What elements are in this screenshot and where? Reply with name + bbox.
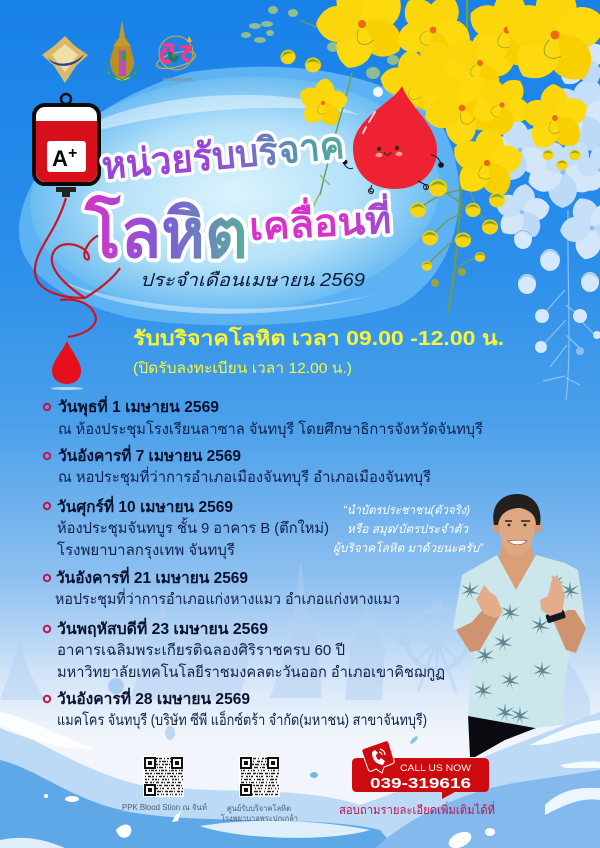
water splash bottom xyxy=(0,678,600,848)
tube forming heart xyxy=(35,198,120,337)
item 3: ห้องประชุมจันทบูร ชั้น 9 อาคาร B (ตึกใหม่) xyxy=(57,517,329,538)
item 4 xyxy=(44,566,400,609)
bag connector xyxy=(56,187,76,197)
arms xyxy=(456,606,586,653)
item 4: วันอังคารที่ 21 เมษายน 2569 xyxy=(56,566,248,587)
QR caption 2 xyxy=(221,803,298,823)
QR codes xyxy=(143,756,280,797)
logo: royal emblem xyxy=(104,20,140,82)
QR caption 2: โรงพยาบาลพระปกเกล้า xyxy=(221,813,298,823)
blood type label: + xyxy=(68,145,77,162)
schedule list xyxy=(44,395,483,730)
blood type label: A xyxy=(52,146,68,171)
falling blood drop xyxy=(51,341,83,390)
QR caption 2: ศูนย์รับบริจาคโลหิต xyxy=(227,803,291,814)
red panel xyxy=(352,758,489,799)
logo: gold emblem xyxy=(42,36,88,83)
item 5: มหาวิทยาลัยเทคโนโลยีราชมงคลตะวันออก อำเภอเขาคิชฌกูฏ xyxy=(57,663,445,681)
bag hook xyxy=(61,94,71,104)
item 2: วันอังคารที่ 7 เมษายน 2569 xyxy=(58,444,241,465)
logos xyxy=(42,20,197,83)
neck xyxy=(497,540,536,590)
enquiry text: สอบถามรายละเอียดเพิ่มเติมได้ที่ xyxy=(339,801,495,817)
head xyxy=(498,505,536,556)
donation time: รับบริจาคโลหิต เวลา 09.00 -12.00 น. xyxy=(133,326,504,350)
phone icon bubble xyxy=(362,741,394,773)
pale water swirl behind title xyxy=(19,63,459,327)
item 3: โรงพยาบาลกรุงเทพ จันทบุรี xyxy=(57,541,235,560)
QR code 2 xyxy=(239,756,280,797)
item 2 xyxy=(44,444,431,487)
item 2: ณ หอประชุมที่ว่าการอำเภอเมืองจันทบุรี อำเภอเมืองจันทบุรี xyxy=(58,466,431,487)
title line 1: หน่วยรับบริจาค xyxy=(100,125,346,188)
face xyxy=(505,521,530,545)
item 5: วันพฤหัสบดีที่ 23 เมษายน 2569 xyxy=(57,617,268,638)
quote: ผู้บริจาคโลหิต มาด้วยนะครับ” xyxy=(333,541,484,556)
item 4: หอประชุมที่ว่าการอำเภอแก่งหางแมว อำเภอแก่งหางแมว xyxy=(55,588,400,609)
flowers: yellow golden shower xyxy=(241,0,600,313)
item 3: วันศุกร์ที่ 10 เมษายน 2569 xyxy=(57,495,233,517)
QR code 1 xyxy=(143,756,184,797)
blood bag with tube xyxy=(34,94,120,337)
logo: anniversary ring xyxy=(155,36,197,81)
call us box xyxy=(352,741,489,799)
hands xyxy=(476,575,565,618)
shirt palm pattern xyxy=(461,574,580,725)
watch xyxy=(545,609,566,624)
blood fill xyxy=(36,121,97,182)
call label: CALL US NOW xyxy=(400,763,472,773)
spokesperson photo xyxy=(453,494,586,757)
phone number: 039-319616 xyxy=(370,775,471,792)
hair xyxy=(493,494,540,525)
skyline silhouette xyxy=(0,560,590,760)
title line 2 suffix: เคลื่อนที่ xyxy=(248,193,392,249)
quote: หรือ สมุด/บัตรประจำตัว xyxy=(347,522,469,537)
item 3 xyxy=(44,495,329,560)
item 1: วันพุธที่ 1 เมษายน 2569 xyxy=(58,395,219,417)
quote: “นำบัตรประชาชน(ตัวจริง) xyxy=(343,503,470,517)
QR caption 1: PPK Blood Stion ณ จันท์ xyxy=(122,802,207,812)
registration note: (ปิดรับลงทะเบียน เวลา 12.00 น.) xyxy=(133,360,352,377)
title xyxy=(84,125,392,272)
item 1 xyxy=(44,395,483,439)
item 5: อาคารเฉลิมพระเกียรติฉลองศิริราชครบ 60 ปี xyxy=(57,642,345,659)
flowers: pale blue blossoms xyxy=(473,32,600,400)
item 6: วันอังคารที่ 28 เมษายน 2569 xyxy=(57,687,250,708)
bag body xyxy=(34,105,99,184)
item 6: แมคโคร จันทบุรี (บริษัท ซีพี แอ็กซ์ตร้า จำกัด(มหาชน) สาขาจันทบุรี) xyxy=(57,710,427,730)
item 6 xyxy=(44,687,427,730)
item 1: ณ ห้องประชุมโรงเรียนลาซาล จันทบุรี โดยศึกษาธิการจังหวัดจันทบุรี xyxy=(58,420,483,439)
shirt xyxy=(453,555,586,728)
trousers xyxy=(468,715,536,757)
subtitle: ประจำเดือนเมษายน 2569 xyxy=(140,270,365,290)
blood type label xyxy=(47,141,86,172)
title line 2: โลหิต xyxy=(84,194,248,272)
item 5 xyxy=(44,617,445,681)
blood drop mascot xyxy=(342,86,444,194)
quote xyxy=(333,503,484,556)
